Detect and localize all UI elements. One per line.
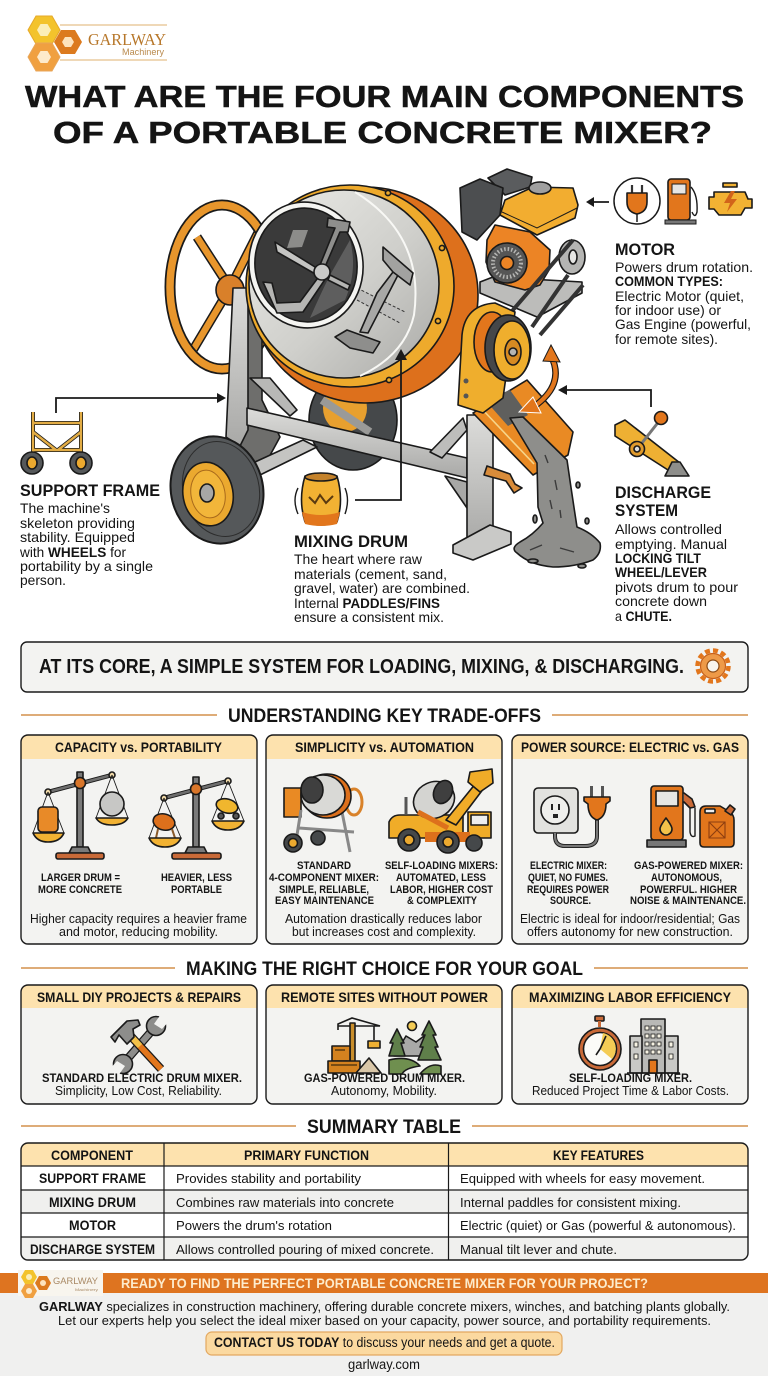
heading: support frame: SUPPORT FRAME (20, 481, 160, 500)
note (520, 912, 740, 939)
footer text: GARLWAY specializes in construction machinery, offering durable concrete mixers, winches, and batching plants globally. (39, 1299, 730, 1314)
labels: & COMPLEXITY (407, 895, 478, 907)
labels: HEAVIER, LESS (161, 872, 232, 884)
text: discharge system description: emptying. Manual (615, 536, 727, 552)
motor icons (614, 178, 752, 224)
icon: scale with heavy mixer (149, 777, 244, 859)
row: mixing drum: MIXING DRUM (49, 1195, 136, 1210)
text: discharge system description: LOCKING TILT (615, 550, 701, 566)
panel title: MAXIMIZING LABOR EFFICIENCY (529, 989, 732, 1005)
icon: drum (295, 473, 348, 526)
text (42, 1071, 242, 1098)
row: support frame: SUPPORT FRAME (39, 1171, 146, 1186)
callout: support frame (19, 393, 226, 588)
row: discharge system: Manual tilt lever and chute. (460, 1242, 617, 1257)
row: discharge system: Allows controlled pouring of mixed concrete. (176, 1242, 434, 1257)
row: discharge system: DISCHARGE SYSTEM (30, 1242, 155, 1257)
heading: discharge system: SYSTEM (615, 501, 678, 520)
footer banner: READY TO FIND THE PERFECT PORTABLE CONCRETE MIXER FOR YOUR PROJECT? (121, 1275, 648, 1291)
row: support frame: Equipped with wheels for easy movement. (460, 1171, 705, 1186)
callout: motor (586, 178, 753, 347)
contact button (206, 1332, 562, 1355)
note: Higher capacity requires a heavier frame (30, 912, 247, 926)
panel: remote sites (266, 985, 502, 1104)
contact button: CONTACT US TODAY to discuss your needs and get a quote. (214, 1335, 555, 1350)
heading: summary table: SUMMARY TABLE (307, 1117, 461, 1138)
text: support frame description: The machine's (20, 500, 110, 516)
title (25, 79, 744, 150)
text: support frame description: person. (20, 572, 66, 588)
text (304, 1071, 465, 1098)
icon: building (627, 1019, 680, 1073)
labels: SIMPLE, RELIABLE, (279, 884, 369, 896)
labels: SOURCE. (550, 895, 591, 907)
panel title: SIMPLICITY vs. AUTOMATION (295, 739, 474, 755)
discharge chute (473, 380, 573, 475)
text: mixing drum description: gravel, water) are combined. (294, 580, 470, 596)
icon: self-loading mixer (389, 769, 493, 853)
row: motor: MOTOR (69, 1218, 116, 1233)
labels: AUTONOMOUS, (651, 872, 722, 884)
title: WHAT ARE THE FOUR MAIN COMPONENTS (25, 79, 744, 114)
icon: discharge lever (615, 412, 689, 476)
labels (527, 860, 746, 907)
labels: POWERFUL. HIGHER (640, 884, 737, 896)
footer text: Let our experts help you select the ideal mixer based on your capacity, power source, and portability requirements. (58, 1313, 711, 1328)
text: discharge system description: WHEEL/LEVER (615, 564, 707, 580)
text: mixing drum description: Internal PADDLES/FINS (294, 595, 440, 611)
icon: crane and building site (328, 1018, 381, 1073)
text: support frame description: skeleton providing (20, 515, 135, 531)
arrow: tilt direction (519, 345, 560, 413)
icon: hammer and wrench (109, 1014, 170, 1076)
handwheel (170, 205, 274, 369)
labels: SELF-LOADING MIXERS: (385, 860, 498, 872)
labels: GAS-POWERED MIXER: (634, 860, 743, 872)
title: OF A PORTABLE CONCRETE MIXER? (53, 115, 712, 150)
footer banner (0, 1273, 768, 1293)
panel title: SMALL DIY PROJECTS & REPAIRS (37, 989, 241, 1005)
summary table (21, 1143, 748, 1260)
arrow: to frame (56, 393, 226, 413)
text: discharge system description: Allows controlled (615, 521, 722, 537)
text: mixing drum description: The heart where raw (294, 551, 423, 567)
icon: trees and mountains (389, 1021, 441, 1074)
text: motor description (615, 259, 753, 347)
logo: Garlway Machinery: GARLWAY (88, 30, 166, 49)
table header: COMPONENT (51, 1148, 134, 1163)
text: mixing drum description (294, 551, 470, 625)
labels: STANDARD (297, 860, 351, 872)
exterior paddle (335, 247, 413, 353)
footer call to action (0, 1270, 768, 1376)
icon: gas pump and can (647, 786, 735, 847)
row: mixing drum: Combines raw materials into concrete (176, 1195, 394, 1210)
labels: EASY MAINTENANCE (275, 895, 374, 907)
belt and pulley (458, 240, 583, 413)
text: support frame description: portability by a single (20, 558, 153, 574)
icon: outlet and plug (534, 786, 610, 846)
row: support frame: Provides stability and portability (176, 1171, 362, 1186)
text: discharge system description (615, 521, 738, 624)
arrow: to motor (586, 197, 609, 207)
panel: power source (512, 735, 748, 944)
icon: stopwatch (579, 1016, 621, 1070)
arrow: to drum (355, 349, 407, 500)
text: STANDARD ELECTRIC DRUM MIXER. (42, 1071, 242, 1085)
row: discharge system (30, 1242, 617, 1257)
text: discharge system description: a CHUTE. (615, 608, 672, 624)
text: motor description: for remote sites). (615, 331, 718, 347)
labels (269, 860, 498, 907)
panel: simplicity vs automation (266, 735, 502, 944)
text: support frame description: stability. Equipped (20, 529, 135, 545)
table header: PRIMARY FUNCTION (244, 1148, 369, 1163)
text: GAS-POWERED DRUM MIXER. (304, 1071, 465, 1085)
labels: NOISE & MAINTENANCE. (630, 895, 746, 907)
note: but increases cost and complexity. (292, 925, 476, 939)
heading: motor: MOTOR (615, 240, 675, 259)
footer logo (18, 1270, 103, 1298)
labels: ELECTRIC MIXER: (530, 860, 607, 872)
support frame beams (247, 408, 467, 508)
text (532, 1071, 729, 1098)
mixing drum (241, 185, 478, 403)
arrow: to chute (558, 385, 651, 407)
panel: labor efficiency (512, 985, 748, 1104)
panel: small DIY projects (21, 985, 257, 1104)
footer text (39, 1299, 730, 1328)
text: mixing drum description: materials (cement, sand, (294, 566, 447, 582)
icon: scale with larger drum (33, 772, 128, 859)
labels: LABOR, HIGHER COST (390, 884, 493, 896)
note: and motor, reducing mobility. (59, 925, 218, 939)
text: motor description: Gas Engine (powerful, (615, 316, 751, 332)
text: motor description: COMMON TYPES: (615, 273, 723, 289)
engine (460, 169, 585, 317)
rear wheel (309, 370, 397, 470)
panel: capacity vs portability (21, 735, 257, 944)
row: mixing drum (49, 1195, 681, 1210)
panel title: POWER SOURCE: ELECTRIC vs. GAS (521, 739, 739, 755)
labels: QUIET, NO FUMES. (528, 872, 608, 884)
support frame post (226, 288, 297, 470)
banner: core statement: AT ITS CORE, A SIMPLE SYSTEM FOR LOADING, MIXING, & DISCHARGING. (39, 656, 684, 678)
callout: discharge system (558, 385, 738, 624)
callout: mixing drum (294, 349, 470, 625)
row: motor (69, 1218, 736, 1233)
table header (51, 1148, 644, 1163)
row: mixing drum: Internal paddles for consistent mixing. (460, 1195, 681, 1210)
heading: making the right choice: MAKING THE RIGHT CHOICE FOR YOUR GOAL (186, 959, 583, 980)
note: offers autonomy for new construction. (527, 925, 733, 939)
text: Simplicity, Low Cost, Reliability. (55, 1084, 222, 1098)
icon: gear (698, 650, 728, 682)
text: motor description: Powers drum rotation. (615, 259, 753, 275)
right leg (453, 415, 522, 560)
logo: Garlway Machinery (28, 16, 167, 71)
illustration: portable concrete mixer (159, 169, 600, 568)
panel title: CAPACITY vs. PORTABILITY (55, 739, 223, 755)
row: support frame (39, 1171, 705, 1186)
icon: frame (21, 412, 92, 474)
labels: 4-COMPONENT MIXER: (269, 872, 379, 884)
panel title: REMOTE SITES WITHOUT POWER (281, 989, 488, 1005)
text: mixing drum description: ensure a consistent mix. (294, 609, 444, 625)
labels: MORE CONCRETE (38, 884, 122, 896)
text: Reduced Project Time & Labor Costs. (532, 1084, 729, 1098)
note: Automation drastically reduces labor (285, 912, 482, 926)
heading: understanding key trade-offs: UNDERSTANDING KEY TRADE-OFFS (228, 706, 541, 727)
logo: Garlway Machinery: Machinery (122, 47, 165, 57)
row: motor: Electric (quiet) or Gas (powerful & autonomous). (460, 1218, 736, 1233)
labels: REQUIRES POWER (527, 884, 609, 896)
footer logo: Machinery (75, 1287, 98, 1292)
text: SELF-LOADING MIXER. (569, 1071, 692, 1085)
labels: PORTABLE (171, 884, 222, 896)
row: motor: Powers the drum's rotation (176, 1218, 332, 1233)
note (30, 912, 247, 939)
icon: standard mixer (284, 774, 362, 852)
heading: discharge system: DISCHARGE (615, 483, 711, 502)
heading: discharge system (615, 483, 711, 520)
text: discharge system description: concrete down (615, 593, 707, 609)
table header: KEY FEATURES (553, 1148, 644, 1163)
note (285, 912, 482, 939)
text: motor description: Electric Motor (quiet, (615, 288, 744, 304)
banner: core statement (21, 642, 748, 692)
labels: LARGER DRUM = (41, 872, 120, 884)
text: motor description: for indoor use) or (615, 302, 721, 318)
labels (38, 872, 232, 896)
footer logo: GARLWAY (53, 1276, 98, 1286)
note: Electric is ideal for indoor/residential; Gas (520, 912, 740, 926)
text: support frame description (19, 500, 153, 588)
text: discharge system description: pivots drum to pour (615, 579, 738, 595)
heading: mixing drum: MIXING DRUM (294, 532, 408, 551)
text: Autonomy, Mobility. (331, 1084, 437, 1098)
front wheel (159, 426, 275, 554)
website: garlway.com (348, 1357, 420, 1372)
text: support frame description: with WHEELS for (19, 544, 126, 560)
concrete pour (510, 417, 600, 568)
labels: AUTOMATED, LESS (396, 872, 486, 884)
interior paddles (263, 218, 350, 313)
